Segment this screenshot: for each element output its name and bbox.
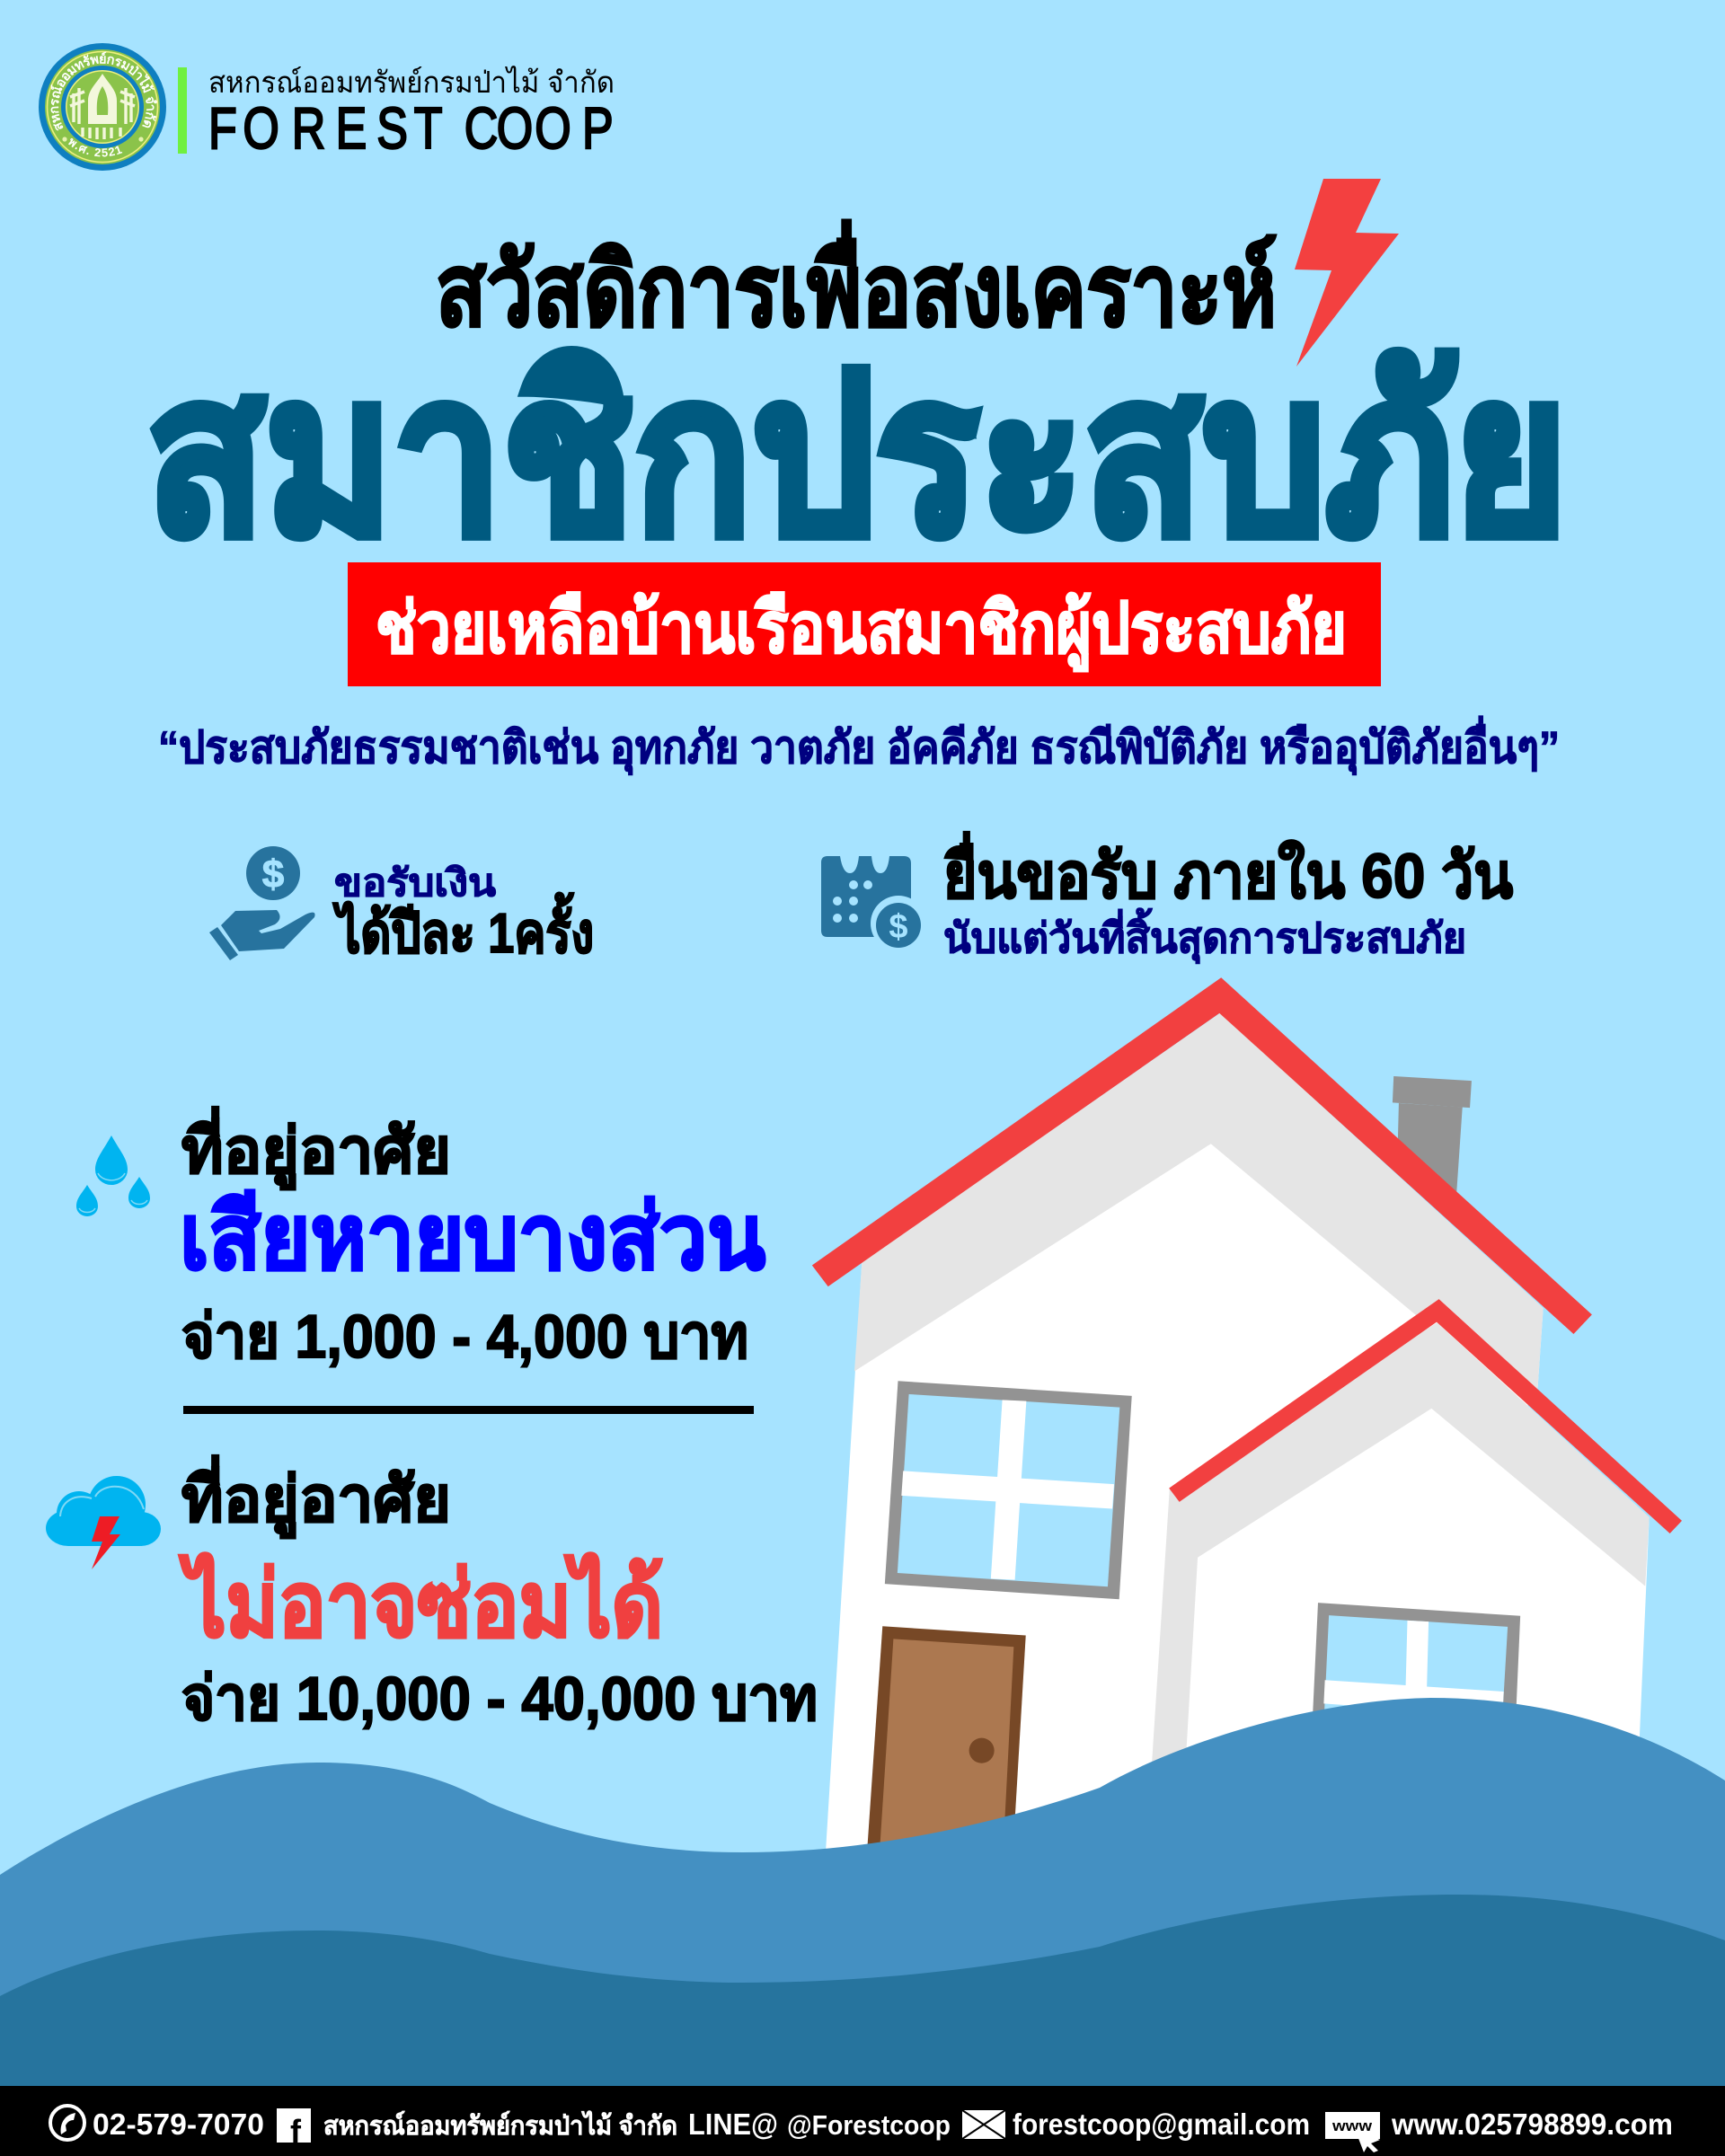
deadline heading: ยื่นขอรับ ภายใน 60 วัน [943, 831, 1513, 911]
line handle: @Forestcoop [787, 2109, 951, 2141]
icon: calendar with coin [821, 856, 926, 951]
icon: facebook [277, 2108, 311, 2150]
side wing gable shade [1151, 1322, 1650, 1772]
icon: website [1325, 2112, 1380, 2152]
icon: hand with coin [209, 846, 315, 960]
logo: cooperative seal [39, 43, 166, 171]
main gable shade [854, 1013, 1544, 1392]
residence label: ที่อยู่อาศัย [181, 1106, 451, 1190]
icon: calendar with coin: $ [889, 908, 908, 946]
deadline subtext: นับแต่วันที่สิ้นสุดการประสบภัย [943, 907, 1466, 964]
title line 1: สวัสดิการเพื่อสงเคราะห์ [436, 219, 1277, 347]
logo: cooperative seal: พ.ศ. 2521 [68, 138, 122, 156]
chimney [1393, 1076, 1472, 1199]
footer contact bar [0, 2086, 1725, 2156]
main roof [812, 977, 1592, 1334]
icon: website: www [1331, 2117, 1373, 2134]
logo divider bar [178, 67, 187, 154]
icon: cloud with lightning [46, 1476, 161, 1569]
main house wall [825, 1013, 1544, 1869]
irreparable heading: ไม่อาจซ่อมได้ [179, 1553, 663, 1656]
section: irreparable [179, 1454, 818, 1733]
benefit: request money label: ขอรับเงิน [334, 862, 496, 904]
icon: water drops [76, 1135, 150, 1216]
rear dark flood wave [0, 1895, 1725, 2086]
icon: envelope [962, 2110, 1005, 2139]
small window [1310, 1603, 1520, 1772]
large window [885, 1381, 1132, 1599]
line id: LINE@ [688, 2107, 778, 2141]
icon: hand with coin: $ [262, 853, 284, 897]
red banner: ช่วยเหลือบ้านเรือนสมาชิกผู้ประสบภัย [376, 588, 1347, 672]
icon: facebook: f [290, 2113, 302, 2150]
red banner [348, 562, 1381, 686]
irreparable payout: จ่าย 10,000 - 40,000 บาท [181, 1665, 818, 1733]
door [866, 1626, 1026, 1869]
section: partial damage [180, 1106, 765, 1371]
side wing roof [1169, 1299, 1682, 1533]
front flood wave [0, 1698, 1725, 2086]
email address: forestcoop@gmail.com [1013, 2107, 1310, 2141]
quote: disaster types: “ประสบภัยธรรมชาติเช่น อุทกภัย วาตภัย อัคคีภัย ธรณีพิบัติภัย หรืออุบัติภัยอื่นๆ” [158, 716, 1560, 775]
phone number: 02-579-7070 [93, 2107, 264, 2141]
brand wordmark: FORESTCOOP [208, 97, 614, 161]
icon: phone [50, 2106, 84, 2140]
illustration: flooded house [812, 977, 1682, 1869]
partial damage payout: จ่าย 1,000 - 4,000 บาท [181, 1303, 748, 1371]
website address: www.025798899.com [1391, 2107, 1673, 2141]
icon: red lightning bolt [1295, 179, 1399, 367]
residence label: ที่อยู่อาศัย [181, 1454, 451, 1539]
side wing wall [1149, 1322, 1650, 1869]
facebook name: สหกรณ์ออมทรัพย์กรมป่าไม้ จำกัด [323, 2110, 677, 2141]
partial damage heading: เสียหายบางส่วน [180, 1188, 765, 1288]
organization name: สหกรณ์ออมทรัพย์กรมป่าไม้ จำกัด [208, 66, 615, 99]
logo: cooperative seal: สหกรณ์ออมทรัพย์กรมป่าไม้ จำกัด [50, 52, 157, 131]
benefit: once per year: ได้ปีละ 1ครั้ง [332, 892, 594, 965]
